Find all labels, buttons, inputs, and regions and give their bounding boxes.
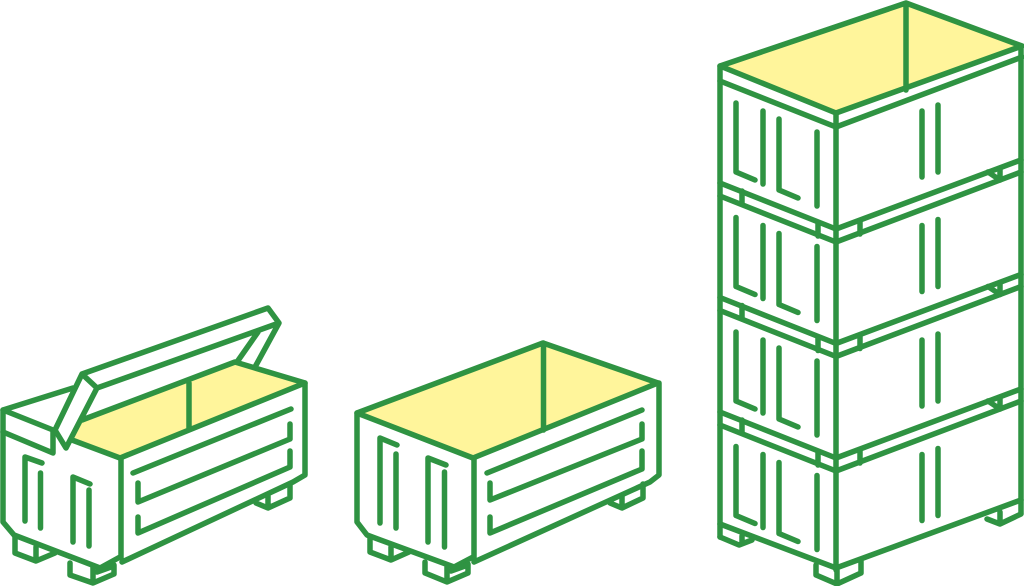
rim lines (72, 362, 305, 458)
tier 2 (720, 218, 1021, 356)
body outline (357, 383, 659, 567)
interior yellow (72, 364, 303, 458)
side face markings (487, 410, 642, 533)
stack of four containers (720, 3, 1022, 584)
feet (370, 484, 643, 582)
rim lines (357, 343, 658, 458)
end face markings (25, 457, 90, 546)
end face markings (380, 438, 446, 547)
bottom edges and feet (720, 500, 1021, 584)
raised lid (55, 308, 279, 448)
tier 1 (720, 103, 1021, 242)
feet (15, 484, 290, 583)
top rim (720, 3, 1022, 127)
body outline (3, 383, 305, 568)
outer edges (720, 46, 1021, 570)
side face markings (133, 409, 291, 533)
tier 4 (736, 446, 938, 550)
open container (357, 343, 659, 582)
interior yellow (357, 343, 658, 458)
container with open lid (3, 308, 305, 583)
interior yellow (720, 3, 1022, 113)
tier 3 (720, 332, 1021, 471)
left lid flap (3, 388, 73, 453)
